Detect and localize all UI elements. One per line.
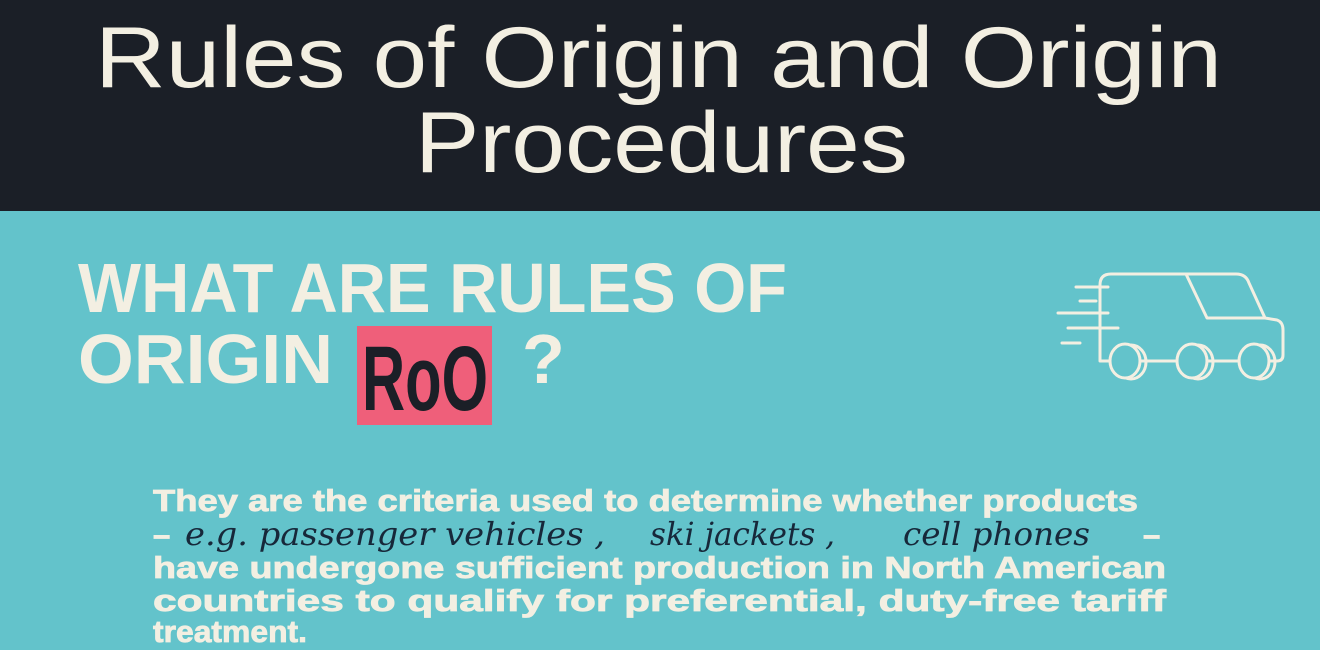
- title: [95, 10, 1222, 191]
- heading: what are rules of origin: ORIGIN: [78, 320, 333, 398]
- handwritten examples: e.g. passenger vehicles ,: [185, 515, 605, 553]
- heading: what are rules of origin: WHAT ARE RULES OF: [78, 249, 787, 327]
- body text: –: [1143, 517, 1160, 552]
- handwritten examples: [185, 515, 1090, 553]
- body text: countries to qualify for preferential, duty-free tariff: [153, 583, 1167, 618]
- RoO badge: RoO: [362, 328, 488, 430]
- heading: what are rules of origin: ?: [522, 320, 565, 398]
- body text: [153, 483, 1167, 649]
- heading: what are rules of origin: [78, 249, 787, 430]
- body text: have undergone sufficient production in North American: [153, 550, 1166, 585]
- body text: –: [153, 517, 170, 552]
- handwritten examples: cell phones: [903, 515, 1090, 553]
- icon: delivery truck: [1058, 274, 1283, 379]
- RoO badge: [357, 326, 492, 430]
- title: Rules of Origin and Origin: [95, 10, 1222, 106]
- body text: treatment.: [153, 614, 307, 649]
- header band: [0, 0, 1320, 211]
- handwritten examples: ski jackets ,: [650, 515, 835, 553]
- title: Procedures: [415, 95, 908, 191]
- body text: They are the criteria used to determine whether products: [153, 483, 1138, 518]
